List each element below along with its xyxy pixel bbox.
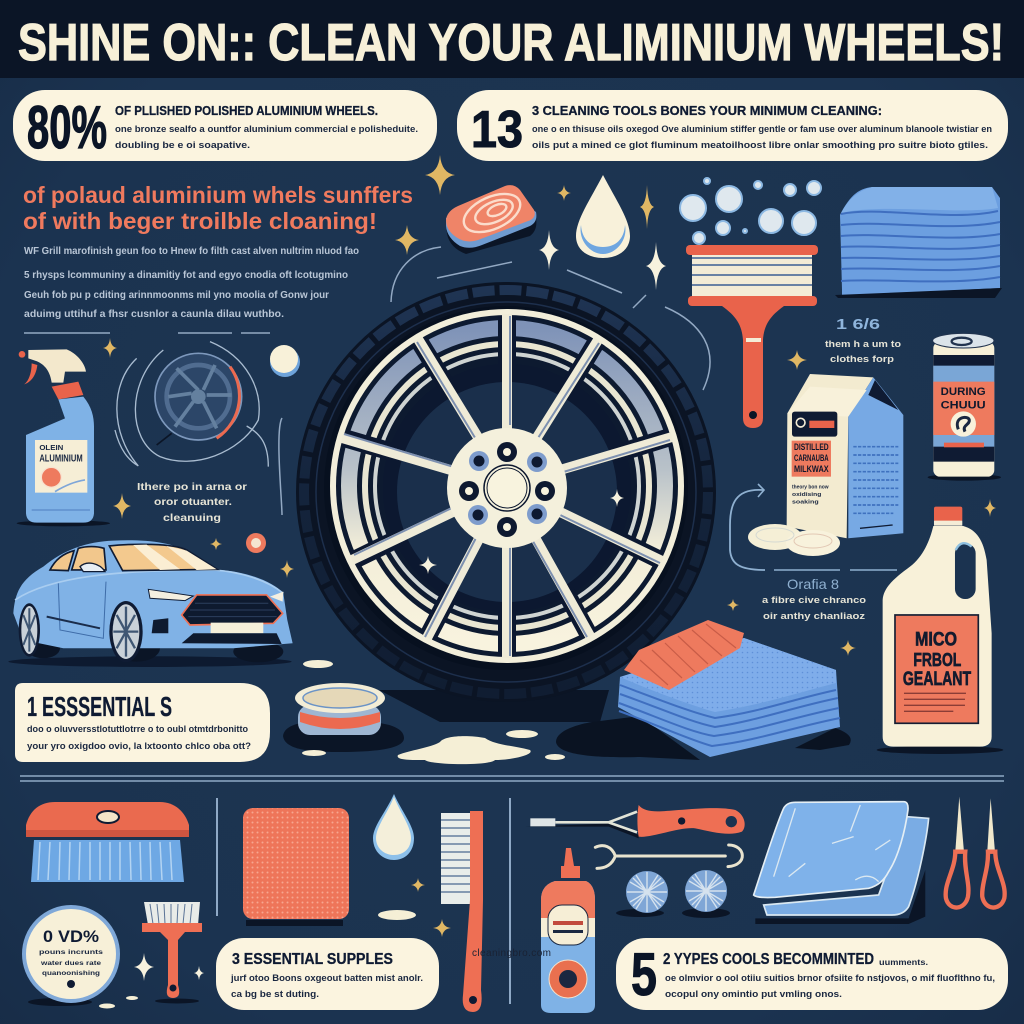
- icon: screwdriver: [525, 805, 745, 838]
- divider: [20, 776, 1004, 781]
- icon: spray bottle: OLEIN: [39, 443, 63, 452]
- icon: sealant jug: FRBOL: [913, 649, 961, 670]
- text: step note: a fibre cive chranco: [762, 595, 866, 606]
- icon: small wheel diagram: [115, 342, 268, 467]
- panel: essentials: [15, 683, 270, 762]
- icon: spray bottle: [17, 349, 110, 526]
- text: 1 6/6 note: them h a um to: [825, 339, 902, 349]
- text block: intro: Geuh fob pu p cditing arinnmoonms mil yno moolia of Gonw jour: [24, 290, 329, 301]
- text: 1 6/6 note: 1 6/6: [836, 316, 880, 333]
- spoke shadows: [344, 316, 670, 656]
- icon: carton: DISTILLED: [794, 442, 829, 452]
- panel: 13 cleaning tools: 3 CLEANING TOOLS BONES YOUR MINIMUM CLEANING:: [532, 103, 882, 118]
- tyre: [296, 282, 716, 702]
- icon: glue bottle: [541, 848, 595, 1013]
- text: wheel diagram caption: oror otuanter.: [154, 497, 232, 508]
- icon: badge: [246, 533, 266, 553]
- icon: small brush: [99, 902, 202, 1008]
- panel: 13 cleaning tools: 13: [471, 101, 523, 159]
- text: 1 6/6 note: clothes forp: [830, 354, 895, 364]
- icon: stacked towels: [835, 187, 1002, 298]
- icon: sponge: [446, 185, 536, 254]
- icon: sealant jug: [877, 507, 1003, 754]
- panel: essentials: 1 ESSSENTIAL S: [27, 691, 172, 722]
- icon: carton: theory bon now: [792, 484, 829, 490]
- text: 1 6/6 note: [825, 316, 902, 364]
- icon: carton: soaking: [792, 500, 819, 506]
- sparkles: gold: [103, 155, 996, 937]
- icon: carton: CARNAUBA: [794, 453, 829, 463]
- icon: cream spill: [302, 660, 565, 764]
- panel: recommended tools: 2 YYPES COOLS BECOMMINTED: [663, 951, 874, 968]
- heading: coral subtitle: of polaud aluminium whels sunffers: [23, 182, 413, 208]
- text block: intro: 5 rhysps lcommuniny a dinamitiy fot and egyo cnodia oft lcotugmino: [24, 270, 348, 281]
- icon: sealant jug: MICO: [915, 630, 957, 651]
- icon: spray bottle: ALUMINIUM: [39, 454, 83, 465]
- panel: 13 cleaning tools: one o en thisuse oils oxegod Ove aluminium stiffer gentle or fam use over aluminum blanoole twistiar en: [532, 124, 992, 134]
- icon: can: CHUUU: [941, 399, 986, 411]
- icon: polish discs: [748, 524, 840, 556]
- text block: intro: aduimg uttihuf a fhsr cusnlor a caunla dilau wuthbo.: [24, 309, 284, 320]
- decorative lines: [24, 247, 710, 515]
- icon: sealant jug: GEALANT: [903, 669, 971, 690]
- panel: 80% stat: OF PLLISHED POLISHED ALUMINIUM WHEELS.: [115, 103, 378, 118]
- icon: car: [8, 540, 293, 667]
- sparkles: white: [134, 230, 666, 981]
- decorative vertical lines: [217, 798, 510, 1004]
- panel: recommended tools: uumments.: [879, 958, 928, 967]
- icon: carton: oxidising: [792, 492, 821, 498]
- panel: essential supplies: ca bg be st duting.: [231, 989, 319, 1000]
- icon: scissors tools: [946, 797, 1005, 908]
- panel: recommended tools: ocopul ony omintio put vmling onos.: [665, 989, 842, 1000]
- panel: recommended tools: oe olmvior o ool otiiu suitios brnor ofsiite fo nstjovos, o mif fluoflthno fu,: [665, 973, 995, 984]
- text: step note: [762, 576, 866, 622]
- icon: towel pile with pad: [556, 620, 851, 760]
- icon: measure badge: water dues rate: [40, 960, 101, 967]
- icon: can: DURING: [941, 386, 986, 398]
- panel: essentials: doo o oluvversstlotuttlotrre o to oubl otmtdrbonitto: [27, 724, 248, 735]
- icon: folded cloths: [754, 802, 929, 924]
- panel: 13 cleaning tools: oils put a mined ce glot fluminum meatoilhoost libre onlar smoothing pro suitre bioto gtiles.: [532, 140, 988, 150]
- icon: wrench: [595, 845, 742, 868]
- text: wheel diagram caption: [137, 482, 247, 524]
- icon: carton: MILKWAX: [794, 464, 829, 474]
- icon: water drop: [576, 175, 630, 258]
- heading: coral subtitle: of with beger troilble cloaning!: [23, 208, 377, 234]
- icon: soap bubbles: [680, 178, 821, 244]
- panel: essentials: your yro oxigdoo ovio, la lxtoonto chlco oba ott?: [27, 741, 251, 752]
- text: step note: Orafia 8: [787, 576, 839, 592]
- panel: essential supplies: [216, 938, 439, 1010]
- panel: essential supplies: jurf otoo Boons oxgeout batten mist anolr.: [230, 973, 423, 984]
- panel: 80% stat: 80%: [27, 94, 107, 161]
- text block: intro: [24, 246, 359, 320]
- icon: measure badge: quanoonishing: [42, 970, 100, 977]
- hub: [447, 428, 567, 548]
- icon: coral sponge pad: [243, 808, 349, 926]
- chart: central wheel hero: [296, 282, 716, 722]
- wheel sparkles: [419, 489, 624, 574]
- panel: essential supplies: 3 ESSENTIAL SUPPLES: [232, 951, 393, 968]
- decorative dashes: [774, 569, 897, 571]
- panel: recommended tools: 5: [631, 941, 657, 1008]
- arrow: loop to carton: [730, 490, 765, 570]
- text: wheel diagram caption: Ithere po in arna or: [137, 482, 247, 493]
- text: step note: oir anthy chanliaoz: [763, 611, 865, 622]
- text: wheel diagram caption: cleanuing: [163, 513, 221, 524]
- icon: measure badge: 0 VD%: [43, 927, 99, 946]
- rim: [330, 309, 684, 663]
- icon: wide brush: [686, 245, 818, 428]
- panel: 80% stat: [13, 90, 437, 161]
- icon: measure badge: [24, 907, 118, 1006]
- icon: round dot: [270, 345, 300, 377]
- icon: carton: [787, 374, 903, 538]
- spokes: [342, 314, 672, 658]
- icon: polishing balls: [616, 870, 730, 918]
- tyre shadow: [379, 690, 609, 722]
- icon: measure badge: pouns incrunts: [39, 949, 104, 956]
- icon: polish tin: [283, 683, 404, 752]
- panel: 13 cleaning tools: [457, 90, 1008, 161]
- icon: hand brush: [26, 802, 189, 882]
- panel: recommended tools: [616, 938, 1008, 1010]
- panel: 80% stat: one bronze sealfo a ountfor aluminium commercial e polisheduite.: [115, 124, 418, 134]
- panel: 80% stat: doubling be e oi soapative.: [115, 140, 250, 150]
- heading: coral subtitle: [23, 182, 413, 234]
- icon: can: [928, 333, 1001, 481]
- text block: intro: WF Grill marofinish geun foo to Hnew fo filth cast alven nultrim nluod fao: [24, 246, 359, 257]
- watermark: cleaningbro.com: [472, 948, 551, 959]
- arrow head: [758, 484, 764, 497]
- icon: drop and blob: [373, 794, 416, 920]
- icon: tall brush: [441, 811, 483, 1012]
